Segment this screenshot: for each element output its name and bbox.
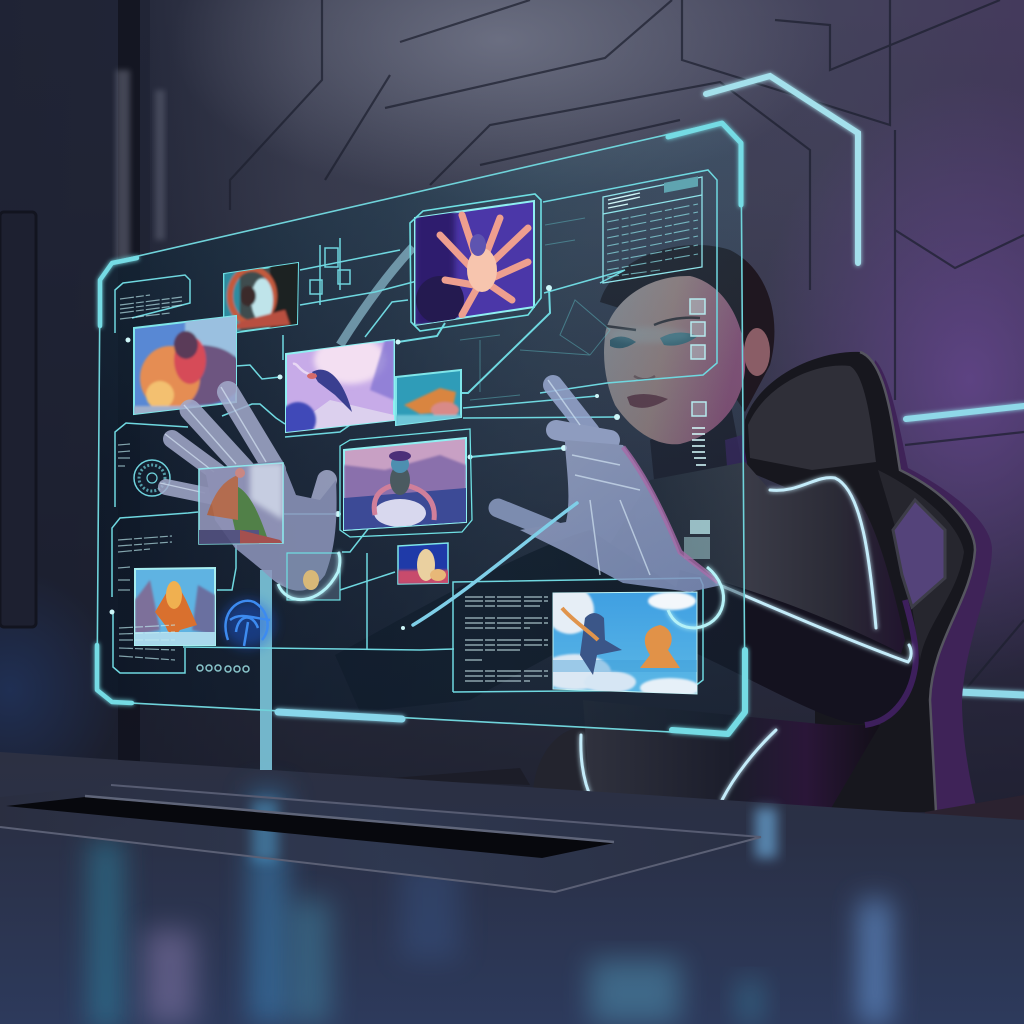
chair hole: [893, 500, 945, 607]
highlights: [548, 380, 650, 575]
left glass hand: [160, 387, 340, 600]
desk reflections: [90, 790, 890, 1024]
top-right data block: [603, 176, 702, 283]
near sleeve: [665, 570, 913, 724]
pink rim: [623, 447, 718, 582]
chair right armrest: [925, 795, 1024, 825]
connector dots: [110, 285, 620, 630]
thumbnail: green figure: [199, 463, 283, 544]
neck and collar: [650, 400, 745, 490]
hair: [600, 245, 774, 412]
side image chips: [684, 520, 710, 559]
wall neon strips: [706, 76, 1024, 695]
hand body: [166, 392, 337, 591]
chair side panel: [878, 470, 964, 660]
hologram panel: [97, 122, 745, 770]
woman: [335, 245, 916, 810]
chair: [392, 352, 1024, 825]
chair back: [745, 352, 975, 812]
chair seat left: [533, 728, 590, 796]
thumbnail: purple pink creature: [410, 194, 541, 331]
wall circuit panel lines: [230, 0, 1024, 690]
face: [604, 276, 745, 444]
text rows: [465, 597, 548, 681]
slot lip: [85, 796, 614, 842]
desk inset tray: [0, 785, 761, 892]
thumbnail: fire warrior: [135, 568, 217, 646]
panel outline: [97, 122, 745, 735]
sleeve purple rim: [865, 600, 916, 725]
thumbnail: swirl: [224, 260, 300, 335]
frame: purple thumbnail: [410, 194, 541, 331]
right glass hand: [498, 380, 722, 592]
thumbnail: purple bird: [285, 338, 395, 434]
centre misc marks: [460, 218, 610, 400]
diagonal light streak: [340, 247, 413, 345]
frame: octopus thumbnail: [340, 429, 472, 537]
panel glass: [97, 122, 745, 735]
facial features: [606, 318, 700, 408]
extended arm neon: [413, 503, 577, 625]
chair purple shell: [860, 360, 992, 812]
headrest: [748, 366, 876, 470]
tray edges: [0, 785, 761, 892]
text block with sky scene: [465, 586, 700, 698]
thumbnail: small ocean: [396, 370, 462, 427]
collar purple: [725, 435, 750, 480]
ear: [744, 328, 770, 376]
upper torso: [560, 462, 905, 725]
thumbnail: orange blue creature: [134, 316, 244, 416]
desk slot: [6, 797, 614, 858]
wrist ring: [278, 552, 340, 600]
small circle icons: [197, 665, 249, 672]
small square icons: [310, 248, 706, 416]
hand body: [498, 385, 722, 592]
chair edge highlight: [860, 352, 975, 812]
wrist ring: [668, 567, 724, 628]
hologram stand: [260, 570, 272, 770]
neon suit lines: [581, 478, 911, 800]
thumbnail: octopus scene: [340, 429, 472, 537]
blue creature: [222, 600, 274, 648]
corner brackets: [97, 123, 745, 734]
panel glass vertical tone: [97, 122, 745, 735]
tray reflection: [252, 800, 278, 862]
finger highlights: [160, 387, 266, 493]
chair left armrest: [392, 768, 530, 785]
gold orb: [303, 570, 319, 590]
level bars: [692, 428, 706, 465]
thumbnail: small figure: [398, 543, 450, 584]
creature glow: [222, 600, 274, 648]
micro text blocks: [118, 176, 702, 660]
woman's extended arm: [335, 530, 680, 712]
gauge icon: [134, 460, 170, 496]
lower torso: [583, 700, 880, 810]
desk: [0, 752, 1024, 1024]
connector lines: [112, 170, 717, 692]
creature filaments: [225, 601, 270, 646]
palm frame: [287, 553, 340, 600]
sky thumbnail: [553, 592, 697, 694]
top-left text: [118, 295, 182, 660]
